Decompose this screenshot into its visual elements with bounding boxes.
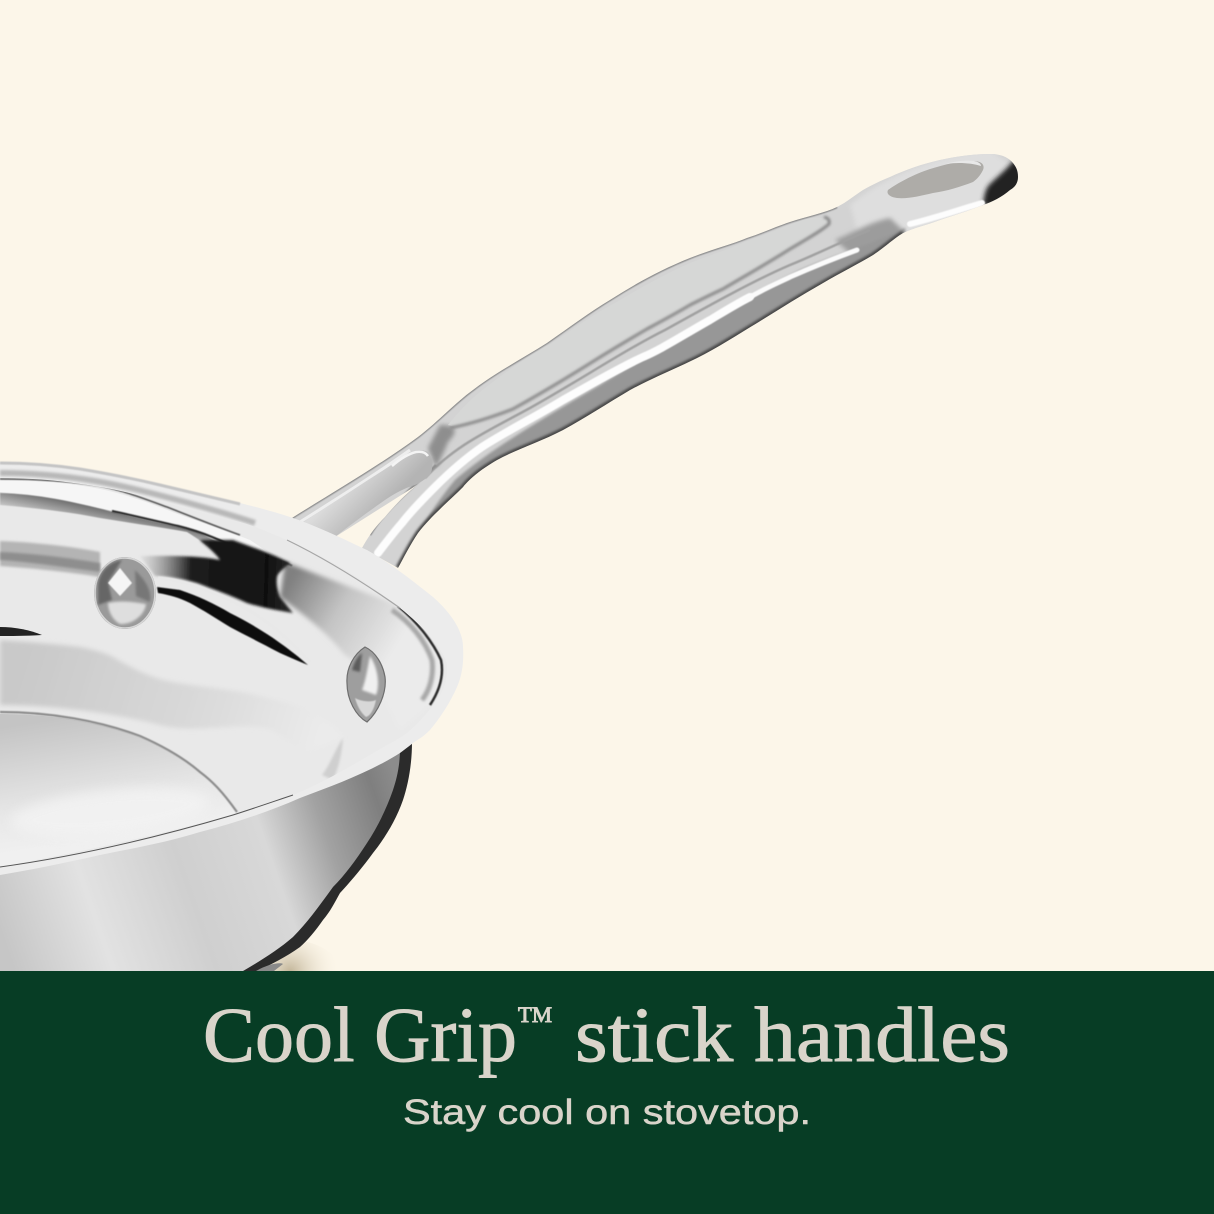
heading: TM (518, 1002, 552, 1027)
rivet highlight (362, 656, 378, 695)
rivet outline (347, 647, 385, 722)
pan handle (292, 150, 1025, 575)
rim inner thin line (287, 540, 400, 608)
floor light bottom smudge (26, 792, 172, 822)
dark reflection blob (140, 540, 293, 613)
streak upper grey (158, 576, 210, 590)
green caption band (0, 971, 1214, 1214)
eye hole rim shine (945, 161, 981, 166)
rim top outer shade (0, 463, 240, 504)
rivet right (347, 647, 385, 722)
heading (203, 991, 1010, 1078)
table shadow (270, 942, 324, 971)
rivet diamond highlight (108, 568, 132, 596)
rim lower line (0, 795, 293, 867)
head highlight (910, 203, 982, 224)
fork junction shade (428, 425, 455, 468)
upper white band (0, 480, 268, 552)
fork gap insert (302, 450, 433, 537)
upper grey band (0, 492, 216, 548)
rim inner shade (392, 610, 433, 700)
heading: Cool Grip (203, 991, 517, 1078)
wall lower fold (322, 740, 343, 778)
rim top lip shade (0, 473, 255, 523)
foot of pan (256, 963, 283, 971)
left wall grey band (0, 541, 100, 577)
dark floor start (0, 627, 42, 636)
neck shading (834, 216, 904, 251)
heading: stick handles (575, 991, 1010, 1078)
floor transition band (0, 639, 256, 728)
bright highlight streak end (745, 250, 857, 300)
grip panel edge (450, 217, 829, 428)
rivet rim (95, 558, 155, 628)
rivet lower highlight (108, 601, 146, 624)
background (0, 0, 1214, 971)
rim underside line (0, 479, 240, 535)
rivet dark (352, 653, 362, 672)
floor (0, 714, 192, 800)
bottom dark edge (398, 233, 903, 568)
lower band of handle (420, 228, 906, 531)
rivet right shade (135, 570, 150, 602)
fork lower arm inner shade (370, 465, 436, 535)
rim inner dark right line (398, 606, 442, 705)
rivet left (94, 557, 156, 629)
pan body (0, 748, 400, 971)
rim (0, 462, 463, 875)
head light metal (852, 154, 1006, 231)
top edge line (292, 207, 837, 518)
handle base metal (292, 154, 1018, 568)
wall sheen right (278, 560, 396, 660)
caption (203, 991, 1010, 1132)
tip dark shading (983, 160, 1025, 206)
bright highlight streak main (378, 297, 750, 553)
pan body dark edge (243, 744, 412, 971)
dark streak (157, 587, 308, 665)
grip panel (448, 218, 828, 426)
floor dark edge (0, 712, 237, 812)
rivet lower highlight (355, 698, 376, 717)
pan (0, 462, 463, 1004)
subheading: Stay cool on stovetop. (403, 1093, 811, 1132)
left wall dark strip (0, 552, 100, 572)
top dark line (112, 511, 292, 566)
fork top rail (300, 450, 410, 522)
insert upper highlight (392, 452, 428, 466)
eye hole (887, 161, 984, 198)
grey line above streak (426, 242, 841, 479)
pan interior (0, 478, 444, 813)
rivet left shade (98, 560, 122, 605)
